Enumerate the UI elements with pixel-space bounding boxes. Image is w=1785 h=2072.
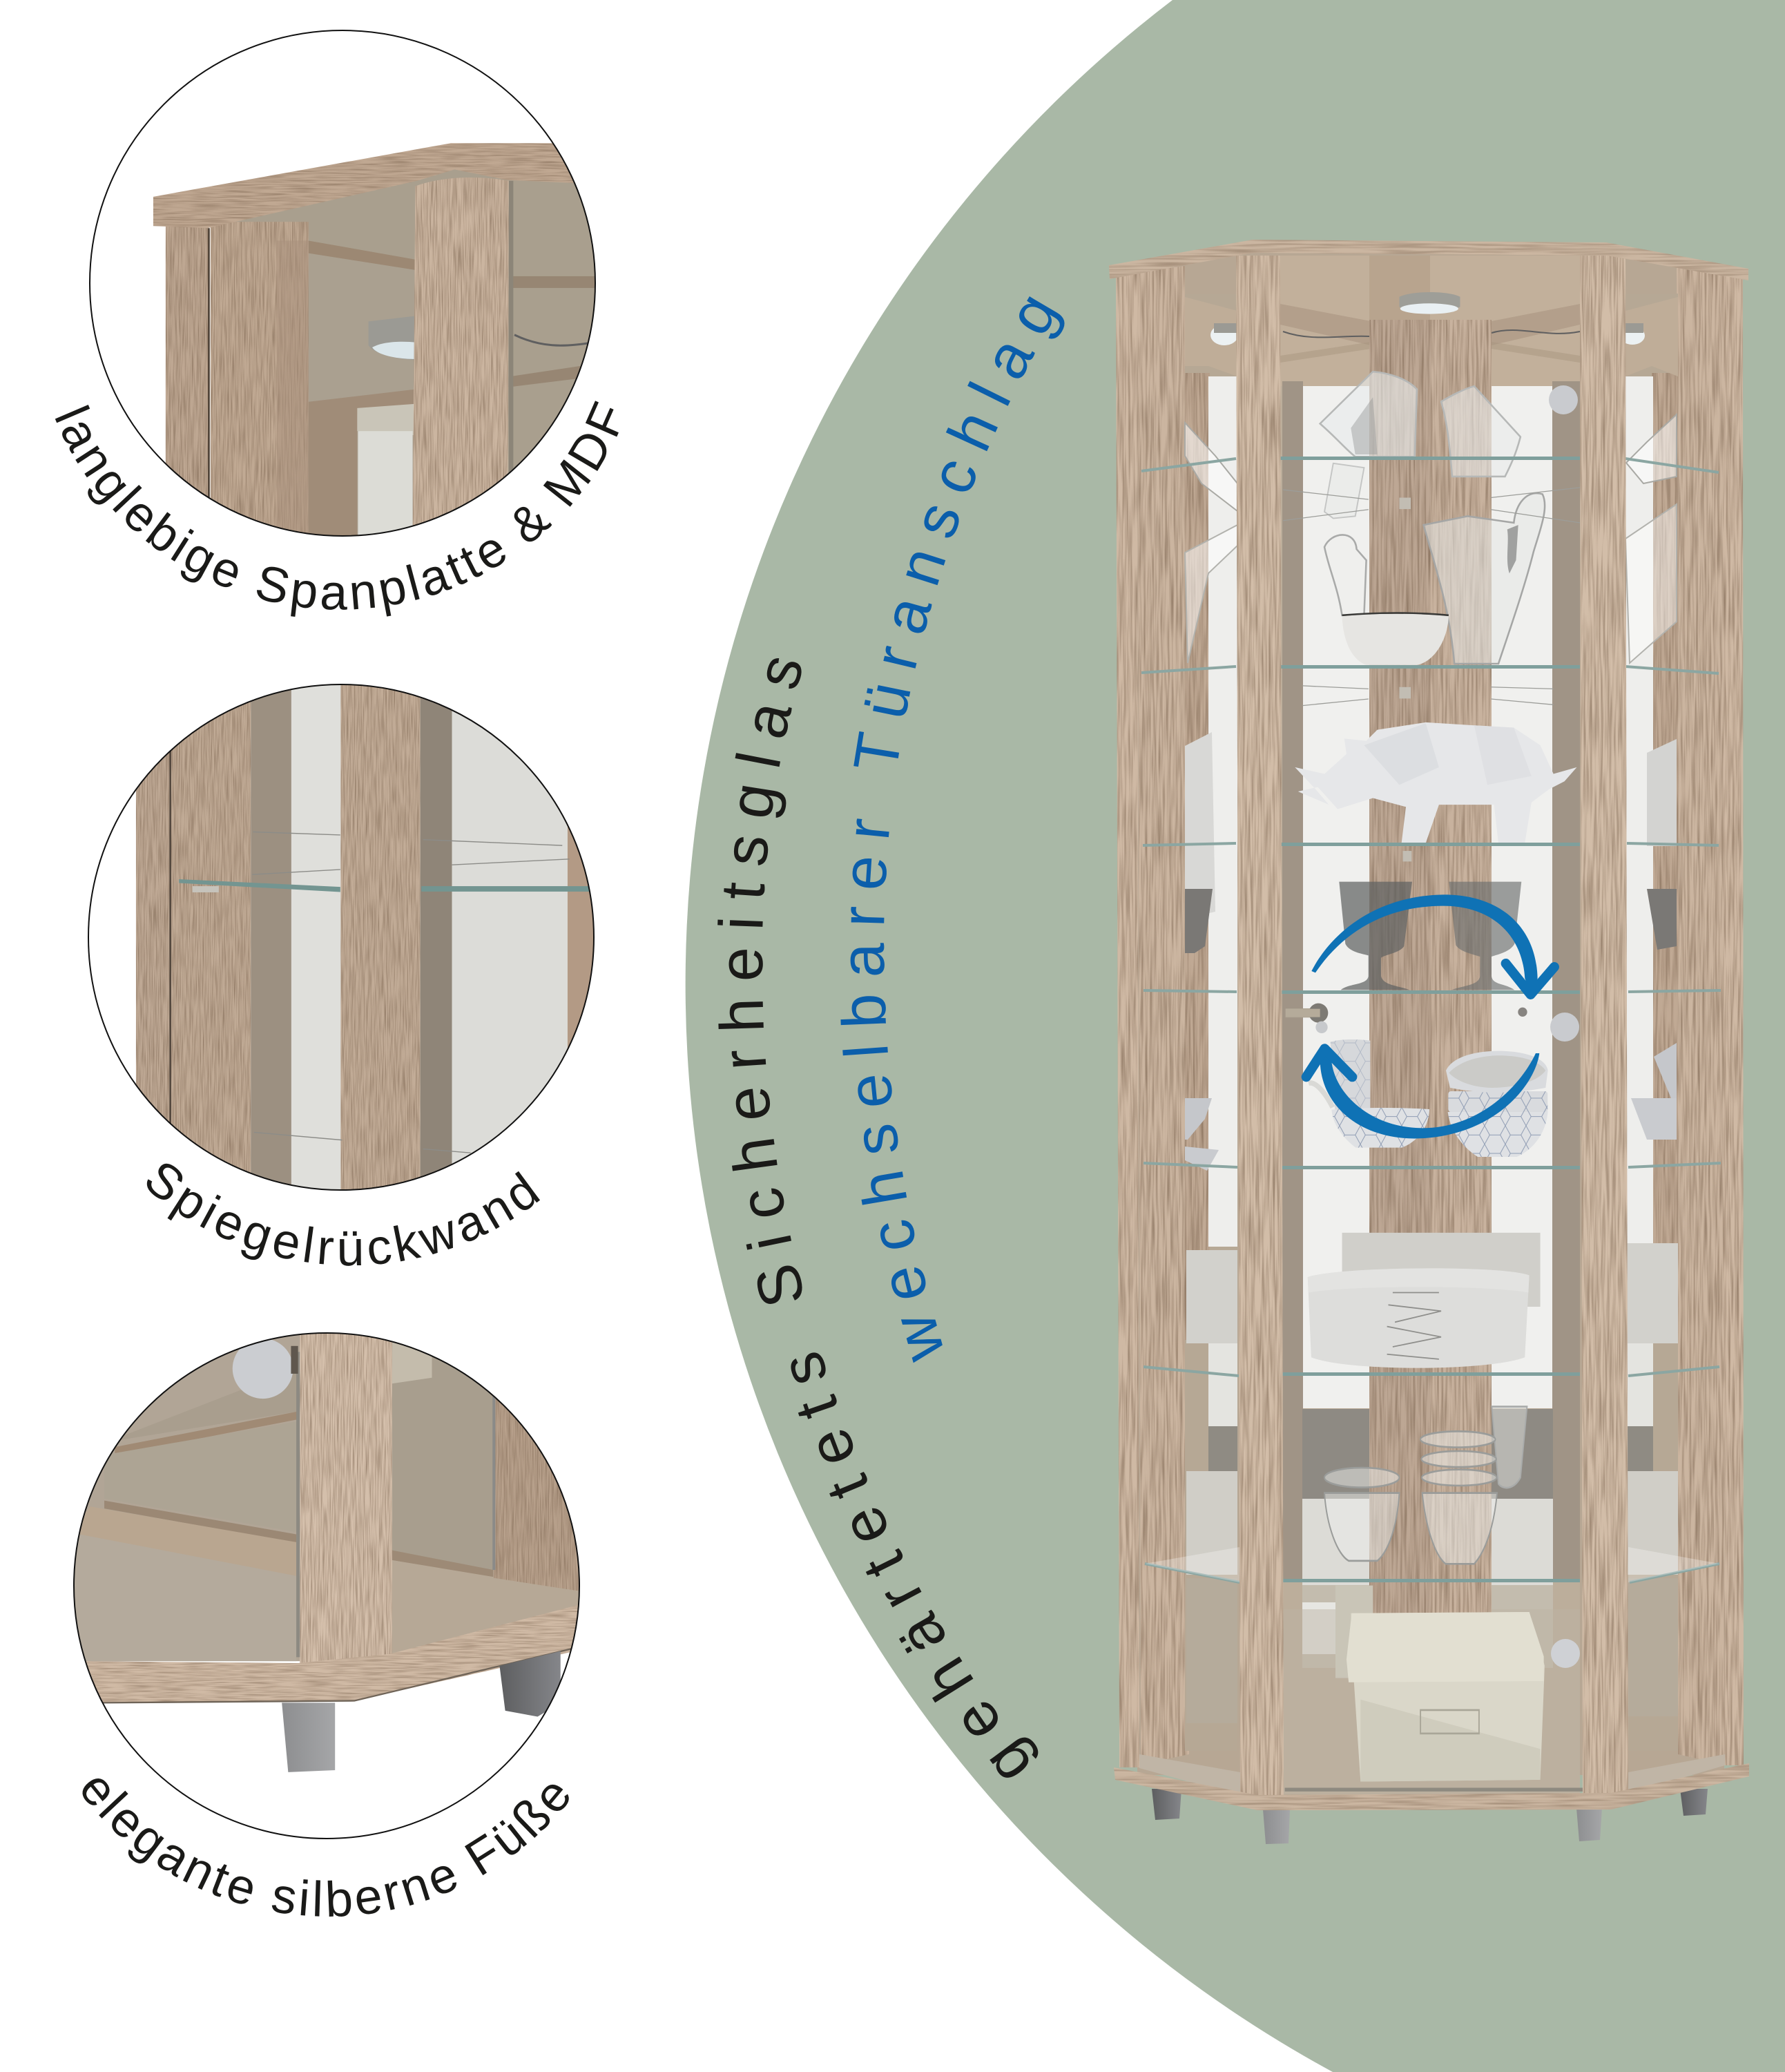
detail circle: mirror back wall — [135, 685, 593, 1189]
detail circle outline 3 — [74, 1333, 579, 1839]
cabinet floor edge right — [1628, 1754, 1725, 1794]
outer right post — [1724, 273, 1744, 1765]
white bowl — [1342, 614, 1449, 665]
tumblers right — [1420, 1431, 1497, 1564]
pitcher left — [1324, 535, 1367, 615]
goblet right — [1449, 882, 1521, 990]
front foot — [282, 1702, 335, 1772]
ceiling LED light — [1399, 292, 1460, 313]
origami rhino — [1295, 722, 1576, 843]
reflected tumblers — [1492, 1407, 1527, 1488]
detail circle: chipboard and MDF top corner — [153, 143, 595, 535]
shelf pins — [1399, 498, 1411, 509]
arrow: top swing — [1311, 894, 1554, 998]
door knob top — [1549, 385, 1578, 414]
corner display cabinet — [1109, 240, 1749, 1844]
door knob bottom — [1551, 1639, 1580, 1668]
curved heading: tempered safety glass: gehärtetets Sicherheitsglas — [717, 658, 1039, 1778]
LED spot — [369, 316, 415, 360]
front right pillar — [1580, 256, 1628, 1794]
goblet left — [1339, 882, 1412, 990]
detail circle: silver feet — [75, 1334, 579, 1772]
base board — [83, 1604, 583, 1702]
vase and jug — [1424, 493, 1545, 664]
floor front edge — [1285, 1787, 1583, 1792]
foot front left — [1263, 1810, 1290, 1844]
foot rear right — [1680, 1789, 1708, 1816]
glass shelf — [179, 879, 340, 892]
cornice — [153, 143, 601, 228]
left side wood panel — [1137, 266, 1189, 1765]
foot front right — [1576, 1808, 1602, 1841]
left mirror strip — [1185, 294, 1238, 1751]
caption: chipboard and MDF: langlebige Spanplatte & MDF — [55, 401, 619, 617]
storage box — [1351, 1612, 1545, 1782]
back hat box reflection — [1342, 1233, 1541, 1307]
caption: silver feet: elegante silberne Füße — [83, 1778, 569, 1917]
hinge and lock — [1286, 1008, 1327, 1017]
detail circle outline 2 — [88, 684, 594, 1190]
door swing arrows — [1306, 894, 1554, 1138]
hat box — [1308, 1268, 1530, 1368]
cabinet floor edge left — [1139, 1754, 1240, 1796]
top cornice — [1109, 240, 1748, 280]
cabinet interior — [1137, 249, 1725, 1796]
tilted glass right — [1441, 386, 1521, 477]
spoon — [1309, 1083, 1333, 1107]
outer left post — [1116, 273, 1139, 1767]
bowl stack left back — [1331, 1039, 1370, 1110]
front pillar — [300, 1328, 392, 1665]
back shelf reflection lines — [1283, 488, 1580, 706]
foot rear left — [1152, 1789, 1181, 1820]
door knob middle — [1550, 1013, 1579, 1042]
arrow: bottom swing — [1306, 1046, 1539, 1138]
tumblers left — [1324, 1468, 1399, 1561]
tilted glass left — [1320, 372, 1417, 457]
wooden pillar — [413, 178, 509, 544]
front left pillar — [1236, 256, 1284, 1796]
right side wood panel — [1677, 266, 1725, 1765]
rear foot — [499, 1651, 561, 1716]
bottom base board — [1114, 1763, 1749, 1810]
goblets and bowls (mid shelves) — [1286, 882, 1548, 1157]
detail circle outline 1 — [90, 30, 595, 536]
door knob — [233, 1339, 293, 1399]
glass shelves — [1141, 457, 1721, 1582]
reflected glass — [1324, 463, 1364, 519]
objects on lower shelves (hat box, glass tumblers, storage box) — [1285, 1233, 1583, 1792]
objects on upper shelves (drinking glasses, vase, bowl, rhino) — [1283, 292, 1580, 861]
door opening: ceiling, mirrors, central column — [1280, 256, 1580, 1796]
bowl front left — [1331, 1108, 1429, 1148]
caption: mirror back wall: Spiegelrückwand — [146, 1163, 540, 1266]
box feet reflection — [1335, 1586, 1373, 1678]
curved heading: reversible door hinge: wechselbarer Türanschlag — [840, 296, 1065, 1363]
right mirror strip — [1620, 294, 1678, 1751]
bowl stack right — [1448, 1109, 1548, 1157]
green circle panel — [686, 0, 1785, 2072]
